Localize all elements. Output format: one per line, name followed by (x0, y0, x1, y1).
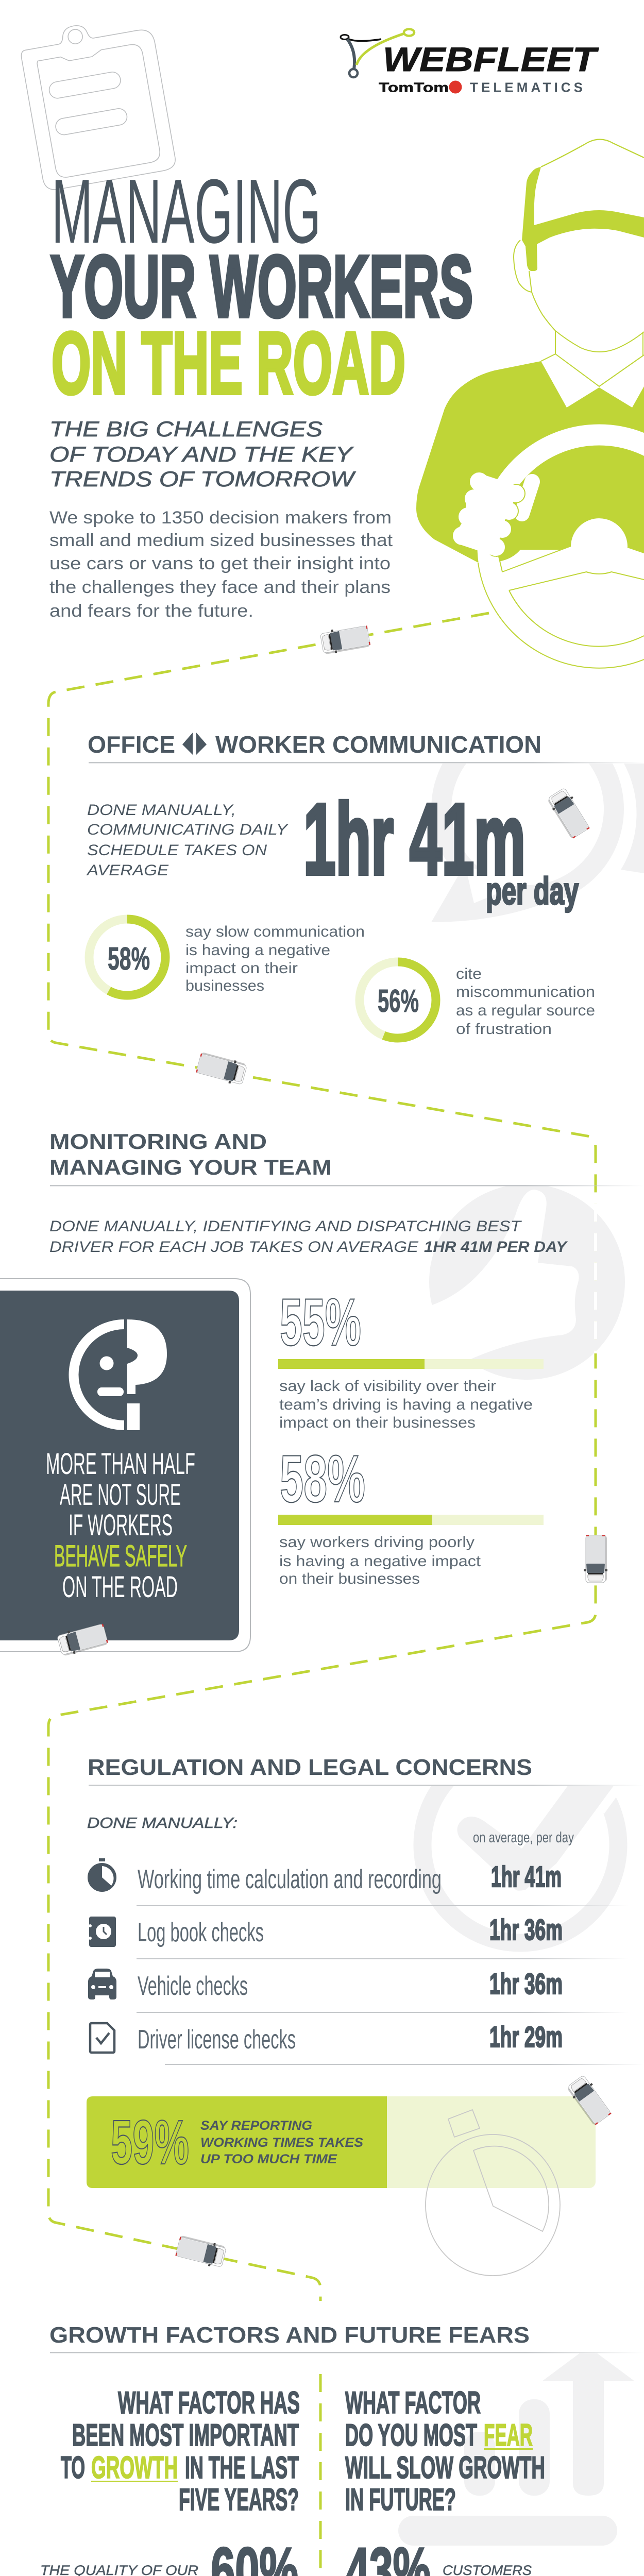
column label: on average, per day (473, 1829, 574, 1846)
row: vehicle checks: Vehicle checks (138, 1971, 248, 2001)
stat: 58% driving poorly: is having a negative impact (279, 1553, 481, 1570)
panel statement (46, 1447, 195, 1604)
subtitle (49, 417, 356, 491)
section heading: office worker communication: WORKER COMMUNICATION (215, 731, 541, 758)
icon: document check (90, 2023, 114, 2053)
section heading: regulation and legal: REGULATION AND LEGAL CONCERNS (88, 1755, 532, 1780)
left question: GROWTH (91, 2450, 178, 2485)
right question: FEAR (484, 2418, 533, 2452)
section heading: monitoring and managing: MONITORING AND (49, 1129, 267, 1154)
left question (61, 2385, 300, 2517)
done manually text (49, 1218, 568, 1256)
stat: 55% lack of visibility: say lack of visibility over their (279, 1378, 496, 1395)
stat: 55% lack of visibility: team’s driving is having a negative (279, 1396, 533, 1413)
intro paragraph: small and medium sized businesses that (49, 531, 393, 550)
donut: 56% (360, 962, 436, 1038)
logo: Webfleet TomTom Telematics: TELEMATICS (470, 79, 583, 95)
icon: face question mark (69, 1319, 167, 1430)
growth factor: quality of service 60% (40, 2534, 298, 2576)
done manually text: 1HR 41M PER DAY (424, 1239, 568, 1256)
section heading: office worker communication (88, 731, 644, 764)
stat text: miscommunication: of frustration (456, 1021, 552, 1038)
stat text: miscommunication: cite (456, 965, 482, 982)
stat: 58% driving poorly (278, 1441, 544, 1587)
section heading: monitoring and managing: MANAGING YOUR TEAM (49, 1155, 332, 1179)
done manually text: COMMUNICATING DAILY (87, 821, 289, 838)
row: log book: 1hr 36m (489, 1913, 563, 1946)
stat: 55% lack of visibility: impact on their businesses (279, 1414, 476, 1431)
row: vehicle checks (88, 1968, 629, 2013)
van on route (566, 2074, 613, 2126)
stat text: slow communication: impact on their (185, 960, 298, 977)
left question: FIVE YEARS? (179, 2482, 299, 2517)
intro paragraph: We spoke to 1350 decision makers from (49, 508, 392, 528)
section heading: monitoring and managing (49, 1129, 644, 1186)
left question: WHAT FACTOR HAS (118, 2385, 300, 2420)
left question: IN THE LAST (185, 2450, 299, 2485)
panel: 59% reporting: SAY REPORTING (200, 2119, 312, 2133)
donut: 58% (89, 919, 165, 995)
intro paragraph: the challenges they face and their plans (49, 578, 391, 597)
dashed road route (48, 613, 596, 2576)
row: working time: 1hr 41m (491, 1860, 562, 1893)
stat text: slow communication (185, 923, 365, 994)
row: log book: Log book checks (138, 1918, 264, 1947)
van on route (584, 1535, 607, 1583)
background growth chart (398, 2347, 635, 2546)
stat: 55% lack of visibility (278, 1284, 544, 1431)
stat text: miscommunication: miscommunication (456, 984, 595, 1001)
subtitle: OF TODAY AND THE KEY (49, 442, 354, 466)
row: driver license: Driver license checks (138, 2025, 296, 2055)
big stat: 1hr 41m per day: per day (486, 870, 579, 912)
row: log book (89, 1913, 629, 1959)
section heading: growth factors: GROWTH FACTORS AND FUTURE FEARS (49, 2323, 530, 2348)
left question: BEEN MOST IMPORTANT (72, 2418, 299, 2452)
intro paragraph: use cars or vans to get their insight into (49, 554, 391, 573)
stopwatch line art (426, 2110, 560, 2276)
van on route (57, 1622, 109, 1657)
row: vehicle checks: 1hr 36m (489, 1968, 563, 2001)
stat text: slow communication: say slow communication (185, 923, 365, 940)
row: working time (88, 1858, 629, 1906)
panel: 59% reporting: 59% (111, 2107, 189, 2177)
done manually text (86, 802, 289, 879)
stat: 55% lack of visibility: 55% (280, 1284, 361, 1360)
donut: 58%: 58% (108, 941, 150, 977)
right question (345, 2385, 545, 2517)
van on route (175, 2234, 227, 2269)
logo: Webfleet TomTom Telematics: WEBFLEET (383, 40, 599, 78)
stat text: slow communication: is having a negative (185, 942, 330, 959)
done manually text: DONE MANUALLY, IDENTIFYING AND DISPATCHING BEST (49, 1218, 522, 1235)
future fear: customers 43% (346, 2534, 578, 2576)
left question: TO (61, 2450, 85, 2485)
subtitle: TRENDS OF TOMORROW (49, 467, 356, 491)
background check mark (413, 1786, 628, 1952)
right question: WHAT FACTOR (345, 2385, 481, 2420)
donut: 56%: 56% (378, 984, 419, 1019)
intro paragraph (49, 508, 393, 621)
row: working time: Working time calculation and recording (138, 1865, 442, 1894)
title (50, 160, 473, 412)
panel statement: ARE NOT SURE (60, 1478, 181, 1512)
subtitle: THE BIG CHALLENGES (49, 417, 323, 441)
logo: Webfleet TomTom Telematics: TomTom (379, 79, 449, 95)
van on route (320, 623, 371, 655)
panel: 59% reporting: WORKING TIMES TAKES (200, 2136, 363, 2150)
icon: stopwatch (88, 1858, 116, 1892)
panel: 59% reporting (87, 2096, 596, 2276)
panel: 59% reporting: UP TOO MUCH TIME (200, 2152, 337, 2166)
panel: workers behave safely (0, 1279, 250, 1652)
done manually text: SCHEDULE TAKES ON (87, 842, 267, 859)
background thumbs up (429, 1186, 625, 1380)
row: driver license: 1hr 29m (489, 2021, 563, 2054)
intro paragraph: and fears for the future. (49, 601, 253, 621)
row: driver license (90, 2021, 644, 2065)
icon: log book (89, 1917, 116, 1947)
panel statement: ON THE ROAD (62, 1570, 178, 1604)
stat text: miscommunication: as a regular source (456, 1002, 595, 1019)
van on route (195, 1052, 247, 1087)
stat text: slow communication: businesses (185, 977, 264, 994)
van on route (546, 787, 591, 840)
done manually text: AVERAGE (86, 862, 169, 879)
panel statement: MORE THAN HALF (46, 1447, 195, 1481)
icon: vehicle (88, 1969, 116, 1999)
logo: Webfleet TomTom Telematics (341, 29, 599, 95)
stat text: miscommunication (456, 965, 595, 1038)
driver illustration (416, 139, 644, 668)
title: MANAGING (52, 160, 321, 262)
done manually label: DONE MANUALLY: (87, 1815, 238, 1832)
stat: 58% driving poorly: on their businesses (279, 1570, 420, 1587)
panel statement: IF WORKERS (69, 1509, 173, 1542)
right question: DO YOU MOST (345, 2418, 477, 2452)
section heading: office worker communication: OFFICE (88, 731, 175, 758)
done manually text: DONE MANUALLY, (87, 802, 236, 819)
stat: 58% driving poorly: 58% (280, 1441, 365, 1516)
panel statement: BEHAVE SAFELY (54, 1539, 187, 1573)
right question: IN FUTURE? (345, 2482, 456, 2517)
done manually text: DRIVER FOR EACH JOB TAKES ON AVERAGE (49, 1239, 419, 1256)
clipboard icon (18, 12, 177, 192)
stat: 58% driving poorly: say workers driving poorly (279, 1534, 474, 1551)
background speech bubbles (431, 764, 644, 922)
